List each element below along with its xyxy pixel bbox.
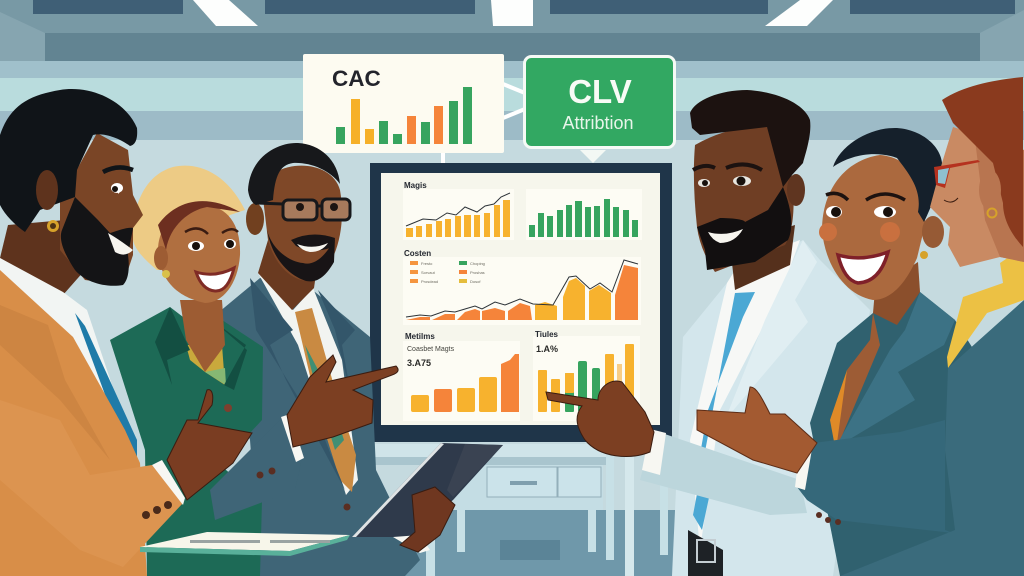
panel: Tiles: Tiules bbox=[535, 330, 559, 339]
legend bbox=[410, 261, 485, 284]
beard bbox=[697, 187, 791, 270]
beard bbox=[267, 230, 335, 281]
panel: Tiles: 1.A% bbox=[536, 344, 558, 354]
face bbox=[930, 127, 1024, 267]
label: Attribution: Attribtion bbox=[562, 113, 634, 133]
blouse bbox=[830, 370, 868, 447]
desk and cabinet bbox=[375, 444, 675, 576]
panel: Metrics: 3.A75 bbox=[407, 358, 431, 368]
hand bbox=[287, 355, 398, 447]
sleeve bbox=[797, 420, 953, 533]
sleeve bbox=[640, 430, 807, 515]
legend: Proshas bbox=[470, 270, 485, 275]
neck bbox=[873, 262, 920, 325]
pointing hand bbox=[546, 381, 654, 456]
hair back bbox=[133, 166, 245, 270]
glasses bbox=[257, 199, 350, 220]
scarf bbox=[947, 247, 1024, 368]
man in blue suit: sleeve and pointing hand bbox=[210, 355, 398, 520]
panel: Metrics: Coasbet Magts bbox=[407, 346, 455, 353]
panel: Metrics: Metilms bbox=[405, 332, 435, 341]
face bbox=[158, 205, 240, 303]
panel: Tiles bbox=[533, 330, 640, 421]
ceiling lights bbox=[193, 0, 833, 26]
panel: Costen area chart: Costen bbox=[404, 249, 431, 258]
coat bbox=[672, 240, 870, 576]
jacket bbox=[840, 300, 1024, 576]
person: man with glasses in blue suit bbox=[213, 143, 420, 576]
face bbox=[262, 166, 342, 281]
jacket bbox=[110, 307, 263, 576]
callout: CAC chart bbox=[303, 54, 504, 153]
tie bbox=[75, 313, 137, 465]
bar chart: CAC bars bbox=[336, 87, 472, 144]
suit bbox=[213, 278, 420, 576]
neck bbox=[0, 220, 85, 295]
panel: top charts: Magis bbox=[404, 181, 427, 190]
hair bbox=[0, 89, 137, 232]
heading: CAC: CAC bbox=[332, 66, 381, 91]
bar chart: Metrics bbox=[411, 354, 519, 412]
tie bbox=[693, 292, 755, 530]
legend: Prosdead bbox=[421, 279, 438, 284]
person: woman with blonde hair in green suit bbox=[110, 166, 263, 576]
neck bbox=[730, 225, 795, 290]
shirt bbox=[0, 258, 137, 465]
line and bar chart: Magis bbox=[406, 193, 510, 237]
heading: CLV: CLV bbox=[568, 73, 632, 110]
hair bbox=[690, 90, 810, 187]
ceiling panels bbox=[33, 0, 1015, 14]
person: woman with red hair and glasses at right edge bbox=[840, 77, 1024, 576]
neck bbox=[258, 240, 318, 310]
glasses bbox=[934, 160, 980, 188]
hair bbox=[248, 143, 340, 205]
panel: Metrics bbox=[403, 332, 520, 421]
tablet and notebook bbox=[140, 443, 503, 556]
wall monitor dashboard bbox=[370, 163, 672, 442]
jacket bbox=[810, 292, 1024, 576]
hand bbox=[167, 390, 252, 500]
shirt bbox=[690, 240, 800, 550]
legend: Fresto bbox=[421, 261, 433, 266]
belt bbox=[688, 530, 723, 576]
bar chart: green bars bbox=[529, 199, 638, 237]
connector lines between callouts bbox=[443, 84, 525, 164]
panel: Costen area chart bbox=[403, 249, 641, 325]
person: smiling woman in teal suit bbox=[697, 128, 1024, 576]
legend: Dosof bbox=[470, 279, 481, 284]
face bbox=[694, 127, 794, 272]
face bbox=[822, 155, 925, 300]
legend: Choping bbox=[470, 261, 485, 266]
callout: CLV attribution bbox=[524, 56, 674, 163]
person: man with beard in white coat bbox=[546, 90, 870, 576]
panel: top charts bbox=[403, 181, 642, 240]
hand bbox=[697, 387, 817, 473]
face bbox=[60, 133, 143, 285]
bar chart: Tiles bbox=[538, 344, 634, 412]
legend: Sorvaut bbox=[421, 270, 436, 275]
beard bbox=[61, 197, 133, 286]
sleeve bbox=[0, 400, 183, 567]
area chart bbox=[406, 260, 638, 320]
hair bbox=[942, 77, 1023, 247]
person: man in orange jacket bbox=[0, 89, 252, 576]
jacket bbox=[0, 270, 147, 576]
hair bbox=[833, 128, 942, 222]
